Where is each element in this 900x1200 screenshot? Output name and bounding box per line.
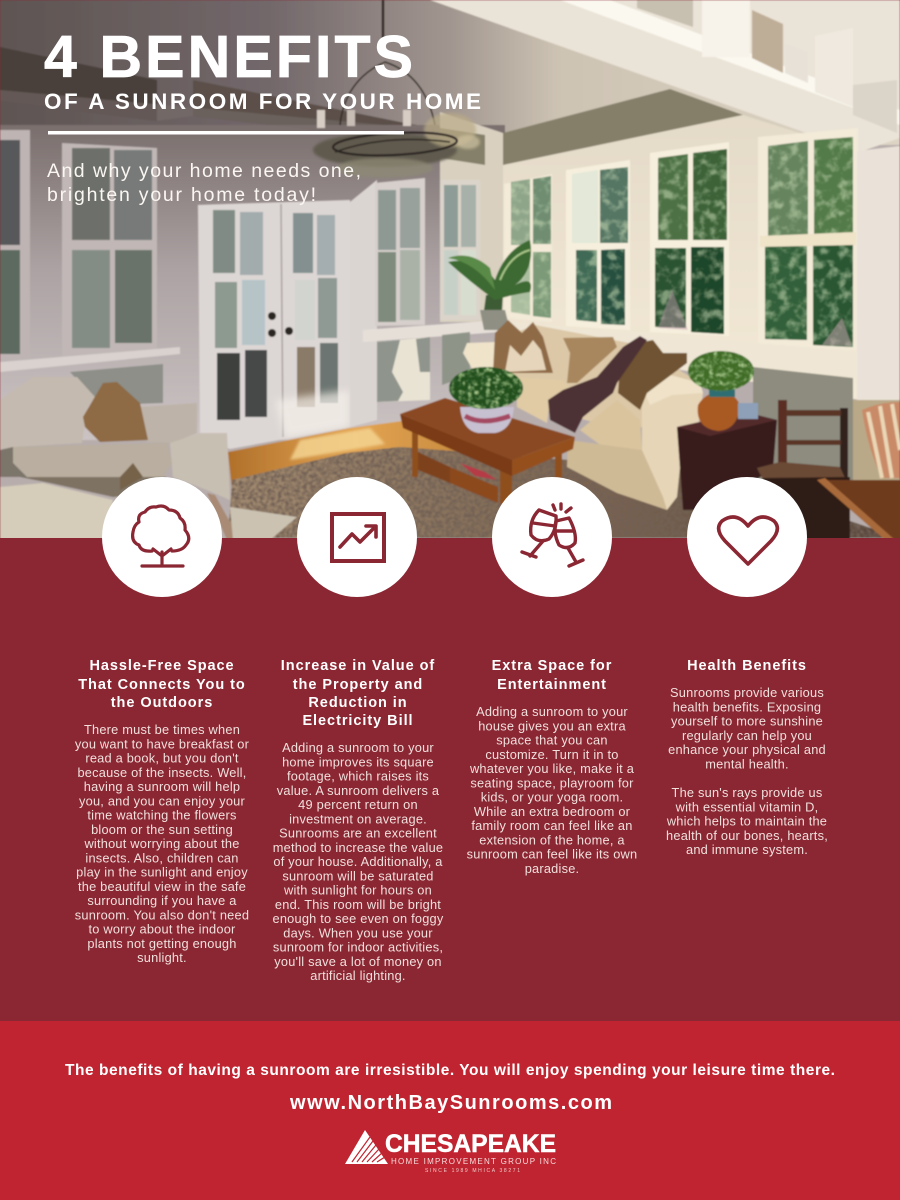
background photo: sunroom interior	[0, 0, 900, 540]
body text: value. A sunroom delivers a	[277, 783, 440, 798]
body text: While an extra bedroom or	[474, 804, 631, 819]
body text: whatever you like, make it a	[469, 761, 635, 776]
logo: license line: SINCE 1989 MHICA 38271	[425, 1168, 520, 1174]
body text: sunroom for indoor activities,	[273, 940, 443, 954]
column 4: health benefits	[666, 658, 828, 857]
icon: heart	[687, 477, 807, 597]
logo: tagline: HOME IMPROVEMENT GROUP INC	[391, 1157, 556, 1166]
white column	[857, 146, 900, 405]
body text: you, and you can enjoy your	[79, 793, 246, 808]
body text: enough to see even on foggy	[272, 911, 444, 926]
subtitle: OF A SUNROOM FOR YOUR HOME	[44, 89, 481, 114]
right windows	[504, 128, 858, 350]
striped armchair	[862, 402, 900, 478]
coffee table	[400, 398, 575, 504]
heading: Health Benefits	[687, 658, 807, 674]
body text: regularly can help you	[682, 728, 812, 743]
body text: Sunrooms provide various	[670, 685, 824, 700]
column 2: increase in value	[272, 658, 444, 983]
body text: yourself to more sunshine	[671, 714, 823, 728]
header title block	[44, 24, 481, 206]
body text: home improves its square	[282, 754, 434, 769]
heading: Increase in Value of	[281, 658, 435, 674]
body text: play in the sunlight and enjoy	[76, 864, 248, 880]
body text: sunroom. You also don't need	[75, 907, 249, 922]
body text: you'll save a lot of money on	[274, 954, 442, 969]
body text: health of our bones, hearts,	[666, 828, 828, 843]
body text: health benefits. Exposing	[673, 699, 821, 714]
body text: insects. Also, children can	[85, 850, 239, 865]
body text: sunlight.	[137, 950, 187, 965]
heading: That Connects You to	[78, 677, 246, 693]
side windows near corner	[350, 178, 480, 427]
body text: you want to have breakfast or	[75, 736, 250, 751]
body text: days. When you use your	[283, 925, 433, 940]
body text: method to increase the value	[273, 840, 443, 855]
body text: sunroom can feel like its own	[467, 846, 637, 862]
heading: Electricity Bill	[302, 713, 414, 729]
body text: end. This room will be bright	[275, 897, 441, 912]
divider rule	[48, 131, 404, 134]
foreground table	[817, 478, 900, 540]
closing statement: The benefits of having a sunroom are irresistible. You will enjoy spending your leisure time there.	[65, 1062, 835, 1079]
body text: investment on average.	[289, 811, 427, 826]
body text: house gives you an extra	[478, 718, 626, 733]
body text: and immune system.	[686, 842, 808, 857]
body text: enhance your physical and	[668, 742, 826, 757]
icon: clinking glasses	[492, 477, 612, 597]
icon: rising chart	[297, 477, 417, 597]
website url: www.NorthBaySunrooms.com	[289, 1092, 612, 1114]
sill and wainscot	[0, 347, 180, 372]
beige sofa	[463, 320, 703, 510]
body text: bloom or the sun setting	[91, 822, 233, 837]
body text: to worry about the indoor	[88, 922, 236, 936]
body text: Adding a sunroom to your	[476, 704, 628, 719]
bowl plant on table	[449, 367, 523, 433]
body text: mental health.	[705, 756, 789, 771]
body text: without worrying about the	[83, 836, 240, 851]
body text: family room can feel like an	[471, 818, 633, 833]
right wall and olive band	[503, 89, 743, 165]
title: 4 BENEFITS: 4 BENEFITS	[44, 24, 413, 90]
body text: artificial lighting.	[310, 968, 406, 983]
body text: of your house. Additionally, a	[273, 854, 443, 869]
chandelier	[313, 0, 480, 178]
heading: Entertainment	[497, 677, 607, 693]
body text: space that you can	[496, 732, 608, 748]
body text: 49 percent return on	[298, 797, 418, 812]
left armchair	[0, 377, 297, 540]
body text: seating space, playroom for	[470, 775, 634, 790]
wooden chair	[757, 400, 850, 540]
heading: Hassle-Free Space	[89, 658, 235, 674]
heading: Reduction in	[308, 695, 408, 711]
window glass foliage	[500, 130, 860, 355]
fascia beam and upper structure	[430, 0, 900, 152]
ceiling	[0, 0, 900, 145]
rug	[228, 445, 900, 540]
left windows	[0, 130, 157, 358]
heading: the Outdoors	[111, 695, 213, 711]
body text: sunroom will be saturated	[282, 868, 434, 883]
lower right wall	[503, 322, 860, 378]
floor	[227, 420, 463, 485]
body text: The sun's rays provide us	[672, 785, 822, 800]
body text: because of the insects. Well,	[77, 765, 247, 780]
icon: tree	[102, 477, 222, 597]
body text: time watching the flowers	[87, 808, 237, 822]
body text: kids, or your yoga room.	[481, 790, 623, 804]
maroon benefits panel	[0, 538, 900, 1021]
body text: with essential vitamin D,	[675, 799, 818, 814]
potted plant on the sill	[448, 240, 531, 330]
body text: Adding a sunroom to your	[282, 740, 434, 755]
body text: surrounding if you have a	[87, 893, 237, 908]
body text: extension of the home, a	[479, 832, 625, 847]
tagline: And why your home needs one,	[47, 160, 361, 182]
logo: triangle mark	[345, 1130, 388, 1164]
body text: read a book, but you don't	[85, 750, 239, 766]
body text: Sunrooms are an excellent	[279, 826, 437, 840]
column 3: extra space	[467, 658, 637, 876]
french doors	[198, 200, 350, 449]
body text: the beautiful view in the safe	[78, 879, 246, 894]
heading: the Property and	[293, 677, 423, 693]
red footer band	[0, 1021, 900, 1200]
tagline: brighten your home today!	[47, 184, 316, 206]
body text: with sunlight for hours on	[283, 882, 432, 898]
body text: which helps to maintain the	[666, 814, 827, 828]
body text: customize. Turn it in to	[485, 747, 619, 762]
body text: plants not getting enough	[87, 936, 237, 951]
body text: having a sunroom will help	[84, 779, 240, 794]
body text: footage, which raises its	[287, 768, 429, 784]
left wall	[0, 125, 505, 440]
side table with copper pot	[677, 351, 777, 510]
plant foliage texture	[448, 351, 754, 410]
throw blanket	[548, 336, 647, 433]
body text: paradise.	[525, 861, 579, 876]
pillows	[493, 320, 553, 373]
logo: wordmark: CHESAPEAKE	[385, 1130, 556, 1158]
column 1: hassle-free space	[75, 658, 250, 965]
body text: There must be times when	[84, 722, 240, 737]
heading: Extra Space for	[492, 658, 612, 674]
